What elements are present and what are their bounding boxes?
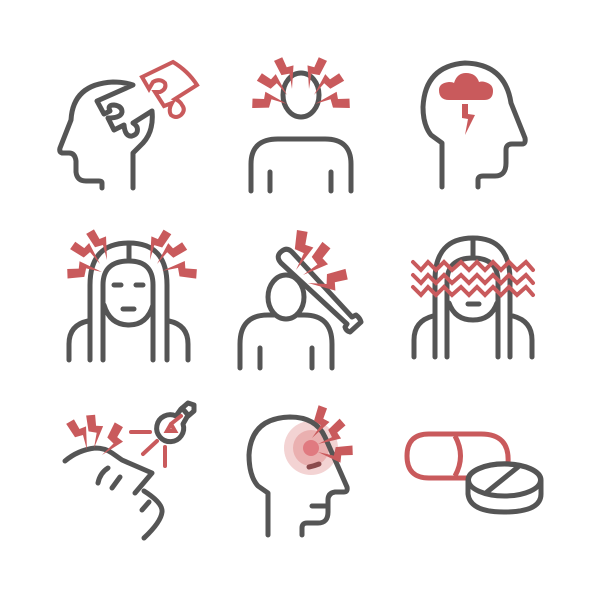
capsule [407, 434, 508, 478]
light bulb [157, 403, 194, 442]
lightning bolts [66, 414, 129, 461]
head profile [65, 448, 162, 538]
icon: capsule and tablet [407, 434, 541, 512]
red puzzle piece [142, 62, 197, 117]
lightning bolts [290, 230, 349, 296]
icon: head sensitive to light [65, 403, 194, 538]
hair and face [69, 243, 188, 360]
icon: woman with dizziness waves [413, 238, 533, 357]
icon: person with head pain [251, 54, 351, 191]
icon: woman with head pain [67, 226, 197, 360]
icon: person hit by bat [240, 230, 361, 368]
head outline with puzzle cut-out [60, 82, 152, 188]
lightning bolts [67, 226, 197, 279]
storm cloud [439, 73, 493, 100]
person [240, 275, 332, 368]
lightning [462, 104, 475, 135]
mouth [468, 302, 479, 306]
icon: head with puzzle piece [60, 62, 197, 188]
pain circles [284, 421, 338, 475]
baseball bat [278, 249, 361, 332]
head outline [423, 63, 525, 187]
icon: head with migraine focus [249, 405, 353, 535]
icon: head with storm cloud [423, 63, 525, 187]
lightning bolts [307, 405, 353, 464]
person [251, 73, 351, 191]
hair and face [414, 238, 532, 357]
eye [309, 464, 319, 467]
light rays [131, 432, 165, 466]
zigzag waves [413, 262, 533, 295]
head outline [249, 417, 347, 535]
tablet [468, 464, 541, 512]
mouth [123, 306, 134, 312]
lightning bolts [252, 54, 350, 109]
